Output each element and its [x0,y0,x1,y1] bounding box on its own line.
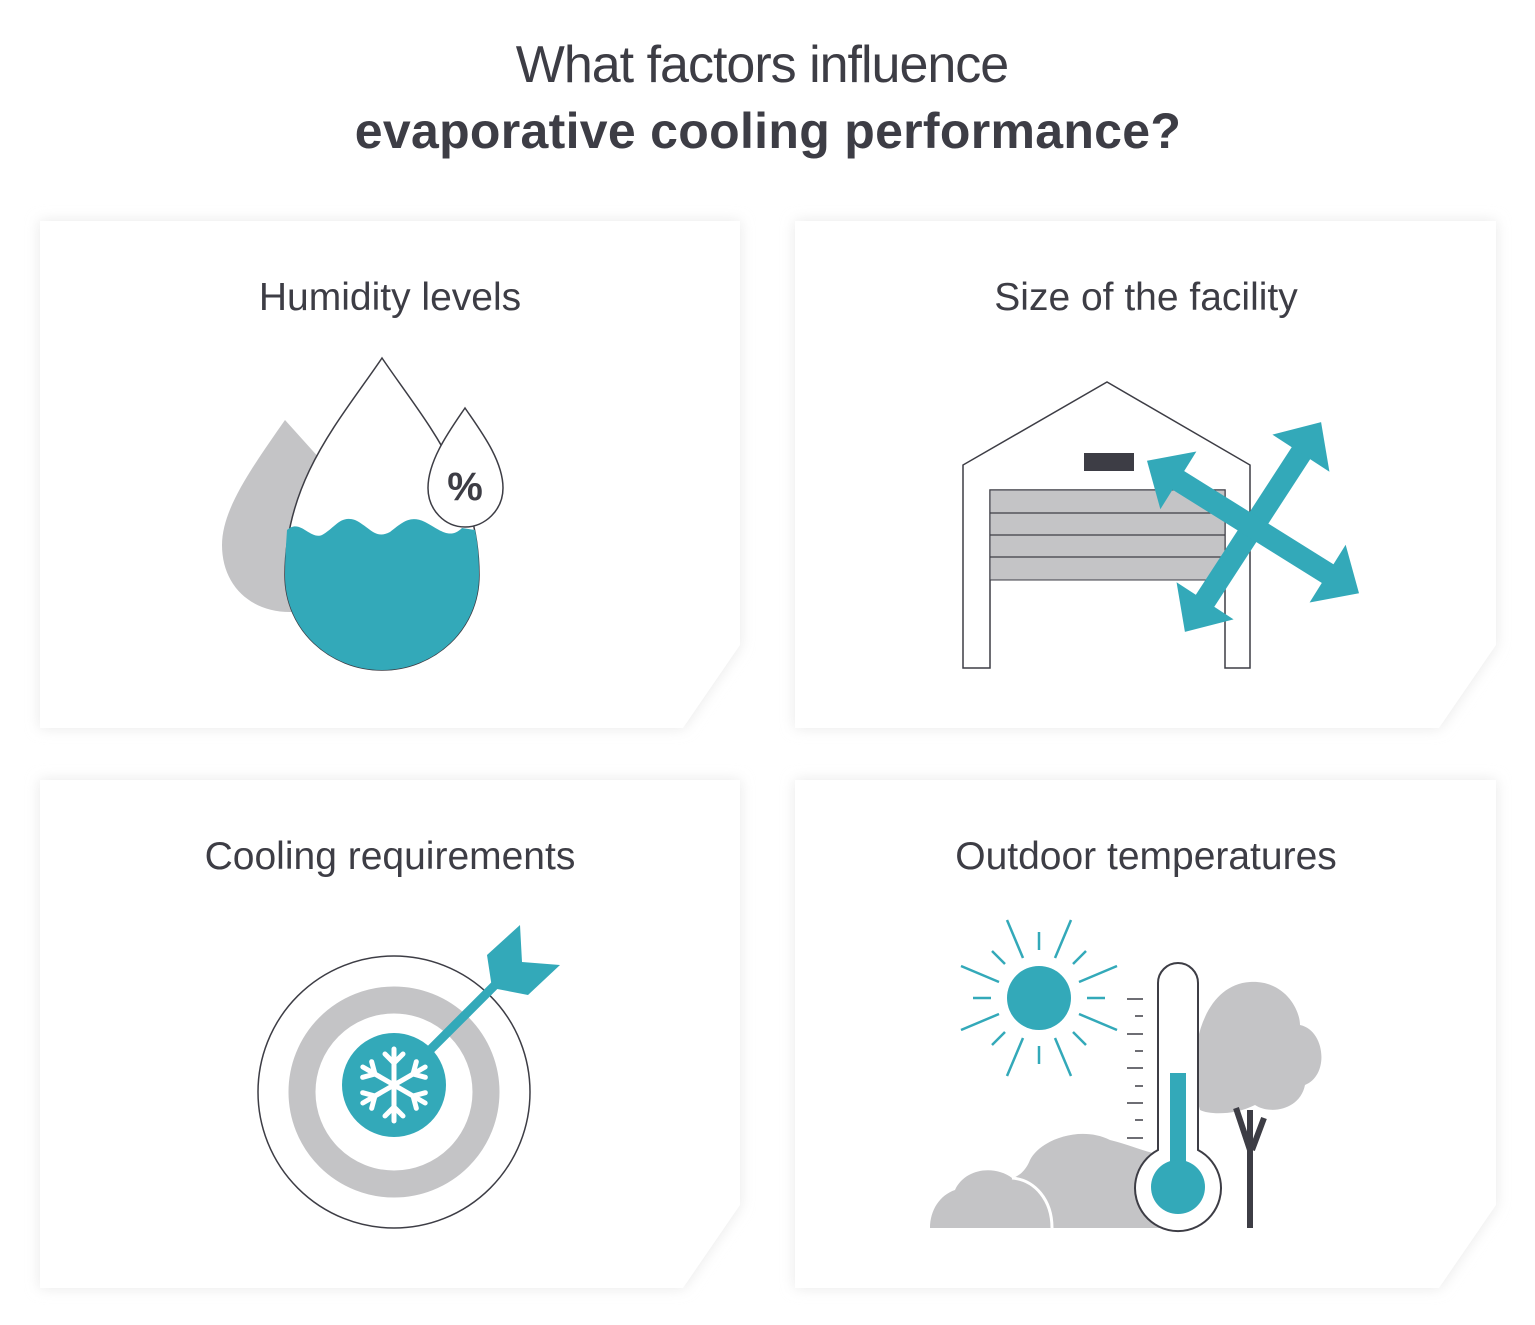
icon: building with arrows [963,382,1377,668]
icon: water drops: % [447,465,483,509]
icon: target with snowflake [258,925,560,1228]
panel: outdoor temperatures [795,780,1496,1288]
title [355,36,1181,159]
title: What factors influence [516,36,1008,94]
heading: humidity: Humidity levels [259,276,521,319]
panel: humidity levels [40,221,740,728]
heading: cooling: Cooling requirements [205,835,575,878]
panel: size of the facility [795,221,1496,728]
icon: sun thermometer trees [930,920,1321,1231]
icon: water drops [222,358,503,670]
panel: cooling requirements [40,780,740,1288]
heading: facility: Size of the facility [994,276,1298,319]
title: evaporative cooling performance? [355,103,1181,159]
heading: outdoor: Outdoor temperatures [955,835,1337,878]
